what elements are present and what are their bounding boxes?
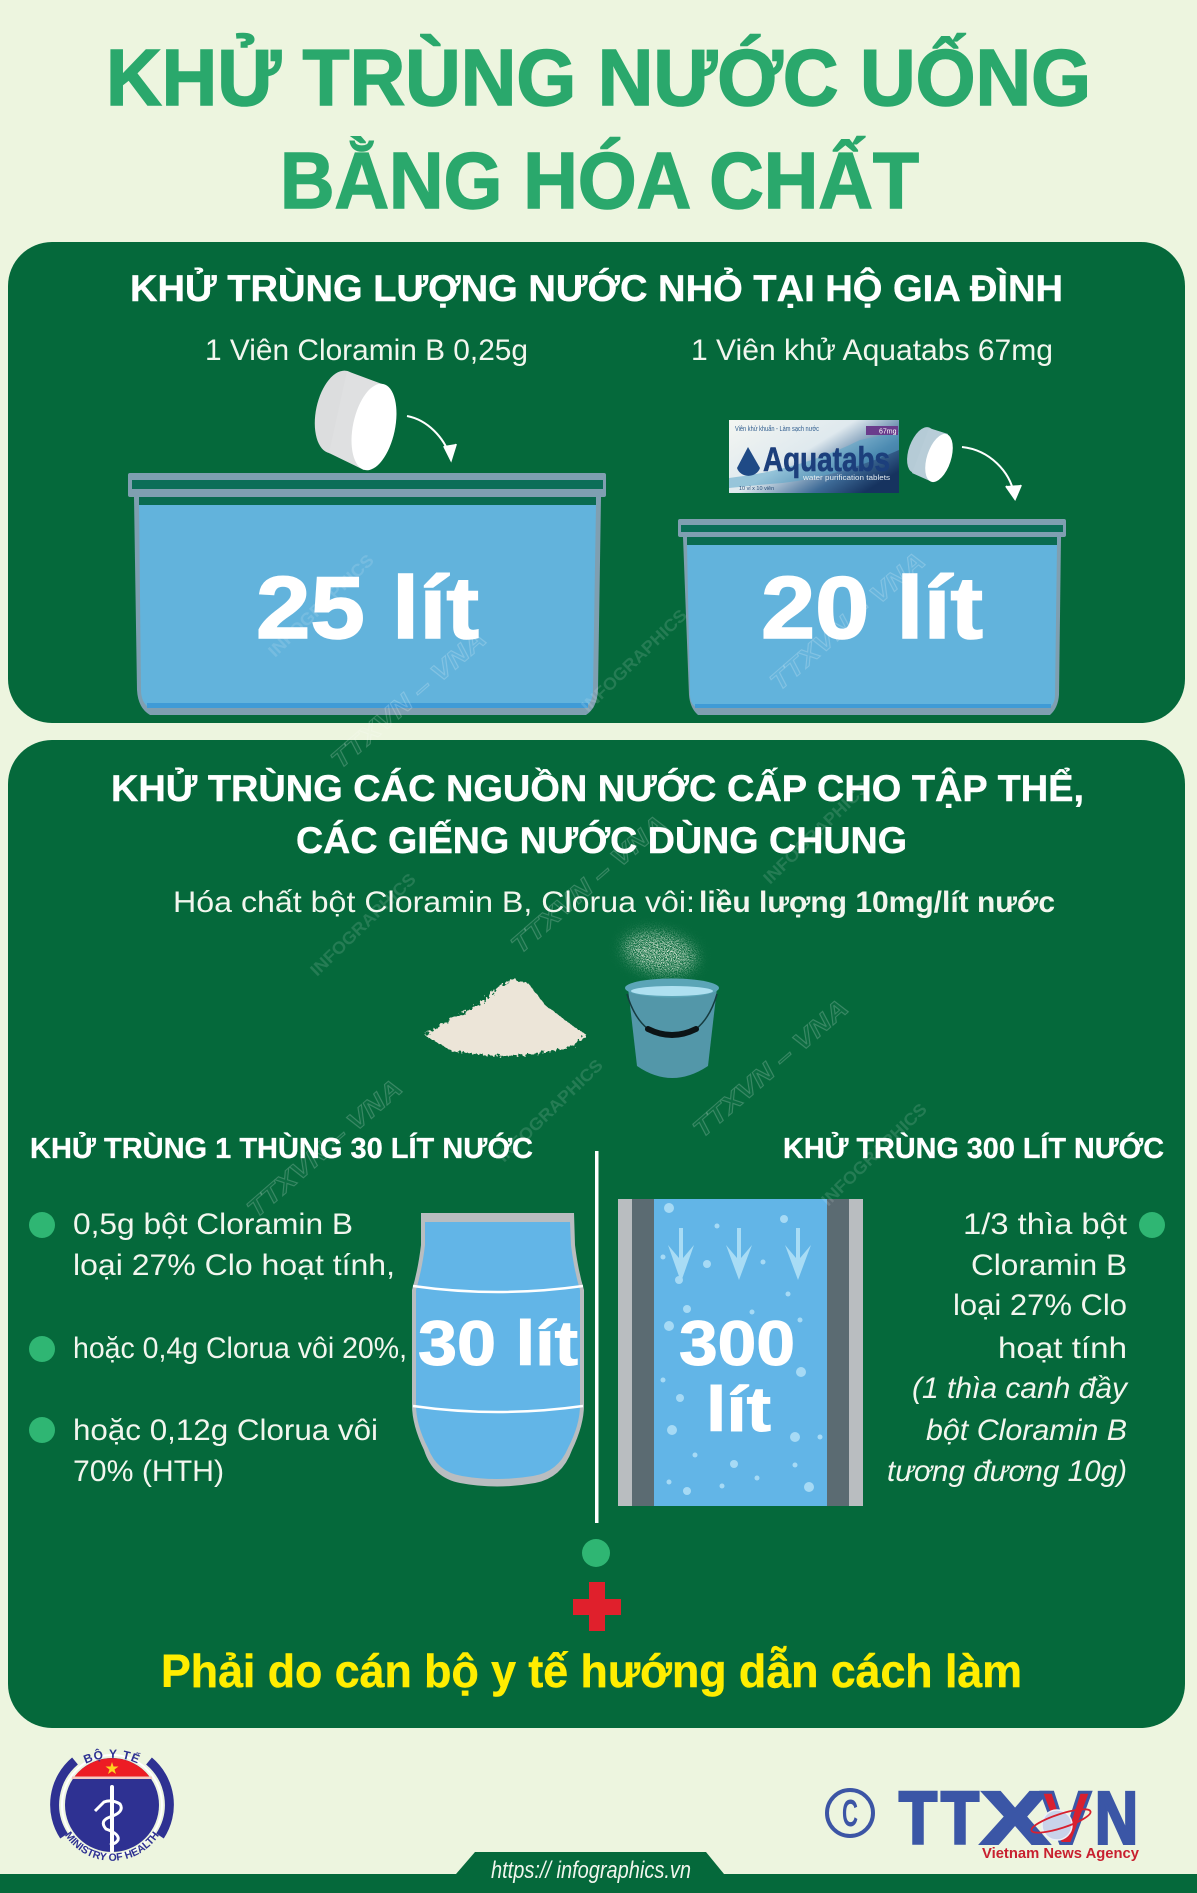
list: 300 litre dosing: bột Cloramin B <box>926 1414 1127 1447</box>
logo: Ministry of Health: MINISTRY OF HEALTH <box>65 1831 159 1861</box>
bubbles <box>660 1203 822 1495</box>
watermarks: TTXVN – VNA <box>688 994 854 1144</box>
quantity: 20 lit: 20 lít <box>761 558 983 657</box>
watermarks: INFOGRAPHICS <box>578 606 691 716</box>
heading: household: KHỬ TRÙNG LƯỢNG NƯỚC NHỎ TẠI HỘ GIA ĐÌNH <box>130 267 1063 309</box>
tagline: Vietnam News Agency <box>982 1845 1140 1862</box>
icon: red cross <box>573 1582 621 1631</box>
icon: copyright <box>827 1790 873 1836</box>
dosage line <box>173 886 1055 919</box>
list: 300 litre dosing: Cloramin B <box>971 1249 1127 1282</box>
label: Aquatabs tablet: 1 Viên khử Aquatabs 67mg <box>691 334 1053 367</box>
arrows: water flow <box>668 1228 811 1282</box>
dosage line: Hóa chất bột Cloramin B, Clorua vôi: <box>173 886 695 919</box>
list: 30 litre dosing: 0,5g bột Cloramin B <box>73 1208 353 1241</box>
icon: Aquatabs box <box>729 420 899 493</box>
title: BẰNG HÓA CHẤT <box>280 136 919 225</box>
logo: TTXVN: T <box>899 1776 937 1860</box>
subheading: 30 litre drum: KHỬ TRÙNG 1 THÙNG 30 LÍT NƯỚC <box>30 1131 533 1165</box>
watermarks: TTXVN – VNA <box>506 810 672 960</box>
quantity: 300 lit: 300 <box>679 1309 795 1379</box>
arrow: tablet into 25 litre basin <box>407 416 456 460</box>
basin: 20 litres <box>678 519 1066 715</box>
website url: https:// infographics.vn <box>491 1857 691 1884</box>
logo: TTXVN: T <box>941 1776 979 1860</box>
list: 300 litre dosing: (1 thìa canh đầy <box>912 1372 1129 1405</box>
footer bar <box>0 1852 1197 1893</box>
basin: 25 litres <box>128 473 606 715</box>
list: 300 litre dosing: loại 27% Clo <box>953 1289 1127 1322</box>
logo: TTXVN: N <box>1095 1776 1138 1860</box>
icon: Aquatabs tablet <box>902 423 958 485</box>
watermarks: INFOGRAPHICS <box>818 1100 931 1210</box>
icon: 300 litre tank: lít <box>706 1375 771 1445</box>
watermarks: TTXVN – VNA <box>326 625 492 775</box>
logo: TTXVN: V <box>1041 1776 1091 1860</box>
icon: Aquatabs box: water purification tablets <box>802 473 890 482</box>
logo: Ministry of Health <box>50 1748 174 1861</box>
watermarks: INFOGRAPHICS <box>760 778 873 888</box>
divider <box>595 1151 598 1523</box>
watermarks: INFOGRAPHICS <box>265 551 378 661</box>
icon: Cloramin B tablet <box>308 366 404 474</box>
list: 300 litre dosing: hoạt tính <box>998 1332 1127 1365</box>
watermarks: TTXVN – VNA <box>242 1074 408 1224</box>
icon: bucket <box>625 978 719 1078</box>
subheading: 300 litre: KHỬ TRÙNG 300 LÍT NƯỚC <box>783 1131 1164 1165</box>
heading: communal: CÁC GIẾNG NƯỚC DÙNG CHUNG <box>296 819 907 861</box>
list: 30 litre dosing: hoặc 0,12g Clorua vôi <box>73 1414 378 1447</box>
icon: 30 litre drum <box>412 1213 584 1486</box>
dosage line: liều lượng 10mg/lít nước <box>699 886 1055 919</box>
icon: Aquatabs box: Aquatabs <box>763 441 890 479</box>
icon: Aquatabs box: 67mg <box>879 428 897 436</box>
callout: medical staff guidance: Phải do cán bộ y tế hướng dẫn cách làm <box>161 1645 1022 1697</box>
list: 30 litre dosing <box>29 1208 407 1488</box>
icon: 300 litre tank <box>618 1199 863 1506</box>
panel: household disinfection <box>8 242 1185 723</box>
watermarks: TTXVN – VNA <box>765 547 931 697</box>
logo: TTXVN: X <box>981 1776 1049 1860</box>
logo: Ministry of Health: BỘ Y TẾ <box>83 1748 141 1764</box>
icon: copyright: C <box>842 1793 858 1835</box>
title <box>106 33 1091 225</box>
list: 300 litre dosing <box>887 1208 1165 1488</box>
icon: sprinkled powder <box>621 927 699 979</box>
logo: TTXVN <box>899 1776 1140 1862</box>
icon: green dot <box>582 1539 610 1567</box>
arrow: tablet into 20 litre basin <box>962 447 1021 499</box>
list: 300 litre dosing: tương đương 10g) <box>887 1455 1127 1488</box>
heading: communal: KHỬ TRÙNG CÁC NGUỒN NƯỚC CẤP CHO TẬP THỂ, <box>111 767 1084 809</box>
heading: communal <box>111 767 1084 861</box>
list: 30 litre dosing: loại 27% Clo hoạt tính, <box>73 1249 395 1282</box>
list: 30 litre dosing: hoặc 0,4g Clorua vôi 20%, <box>73 1332 407 1365</box>
label: Cloramin B tablet: 1 Viên Cloramin B 0,25g <box>205 334 528 367</box>
list: 300 litre dosing: 1/3 thìa bột <box>963 1208 1128 1241</box>
icon: Aquatabs box: Viên khử khuẩn - Làm sạch nước <box>735 424 819 433</box>
quantity: 25 lit: 25 lít <box>256 558 479 657</box>
list: 30 litre dosing: 70% (HTH) <box>73 1455 224 1488</box>
watermarks: INFOGRAPHICS <box>494 1056 607 1166</box>
icon: Aquatabs box: 10 vỉ x 10 viên <box>739 485 774 492</box>
watermarks: INFOGRAPHICS <box>307 870 420 980</box>
panel: communal water sources <box>8 740 1185 1728</box>
title: KHỬ TRÙNG NƯỚC UỐNG <box>106 33 1091 122</box>
quantity: 30 lit: 30 lít <box>418 1309 578 1379</box>
icon: powder pile <box>424 979 587 1056</box>
watermarks <box>242 547 931 1224</box>
